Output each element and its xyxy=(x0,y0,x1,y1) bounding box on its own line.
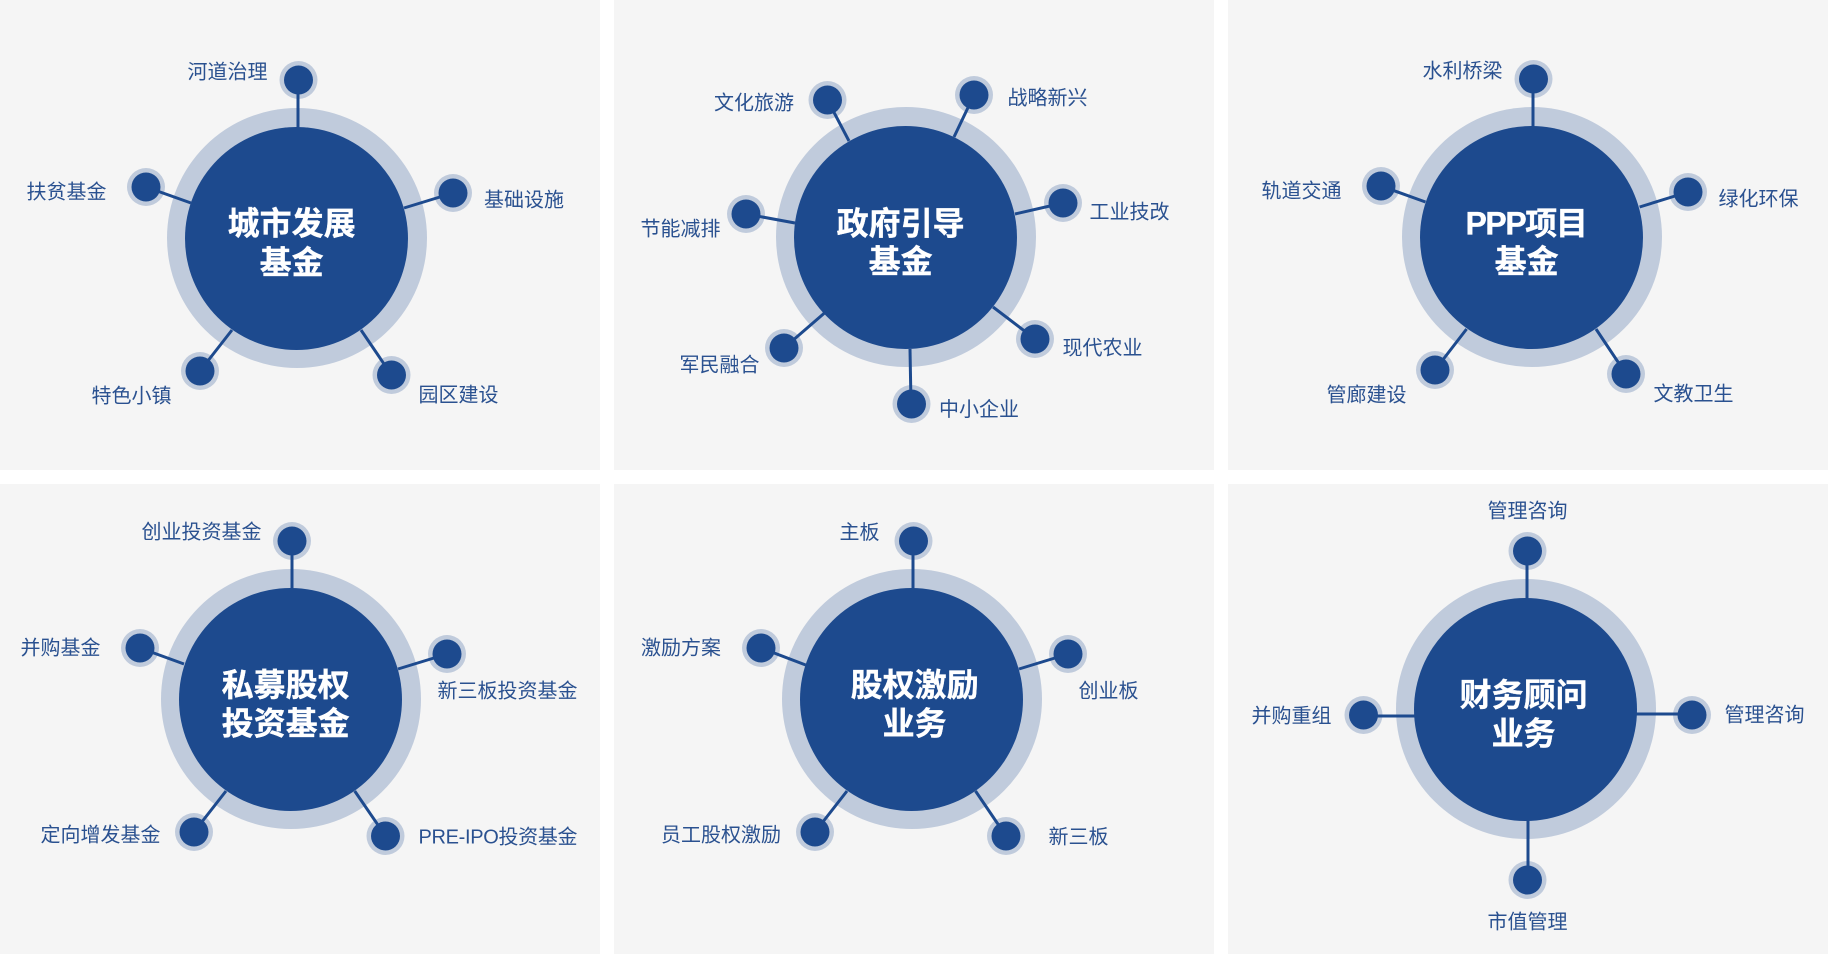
node marker: 文化旅游 xyxy=(808,81,849,141)
heading: 城市发展基金: 城市发展 xyxy=(228,206,356,242)
heading: 城市发展基金: 基金 xyxy=(260,244,324,280)
panel: 私募股权投资基金 xyxy=(0,484,600,954)
central circle xyxy=(1396,579,1656,839)
label: 文化旅游: 文化旅游 xyxy=(714,92,794,114)
label: 节能减排: 节能减排 xyxy=(640,218,720,240)
node marker: 特色小镇 xyxy=(181,330,232,390)
node marker: 园区建设 xyxy=(361,330,410,394)
node marker: 扶贫基金 xyxy=(127,168,191,206)
label: 新三板投资基金: 新三板投资基金 xyxy=(438,680,578,702)
node marker: 管理咨询 (right) xyxy=(1636,696,1711,734)
central circle xyxy=(161,569,421,829)
heading: 财务顾问业务: 业务 xyxy=(1492,716,1556,752)
label: 中小企业: 中小企业 xyxy=(939,398,1019,421)
node marker: 激励方案 xyxy=(742,629,806,667)
label: 水利桥梁: 水利桥梁 xyxy=(1422,60,1502,82)
node marker: 节能减排 xyxy=(727,195,795,233)
panel: PPP项目基金 xyxy=(1228,0,1828,470)
label: 创业板: 创业板 xyxy=(1078,680,1138,702)
heading: PPP项目基金 xyxy=(1465,206,1588,280)
node marker: 定向增发基金 xyxy=(175,791,226,851)
node marker: 管廊建设 xyxy=(1416,329,1467,389)
label: 文教卫生: 文教卫生 xyxy=(1654,382,1734,406)
node marker: 市值管理 xyxy=(1508,820,1546,899)
node marker: 主板 xyxy=(894,522,932,589)
node marker: 新三板 xyxy=(976,791,1025,855)
heading: 城市发展基金 xyxy=(228,206,356,280)
heading: 股权激励业务: 业务 xyxy=(883,706,947,742)
label: 并购基金: 并购基金 xyxy=(20,636,100,660)
label: 河道治理: 河道治理 xyxy=(188,60,268,84)
label: 并购重组: 并购重组 xyxy=(1252,704,1332,728)
node marker: 军民融合 xyxy=(765,313,824,367)
heading: 政府引导基金 xyxy=(837,206,965,280)
node marker: 并购基金 xyxy=(121,629,184,667)
heading: 股权激励业务: 股权激励 xyxy=(851,667,979,703)
panel: 财务顾问业务 xyxy=(1228,484,1828,954)
heading: 财务顾问业务 xyxy=(1460,677,1588,752)
heading: 政府引导基金: 政府引导 xyxy=(837,206,965,242)
heading: 私募股权投资基金: 投资基金 xyxy=(222,706,350,742)
label: 管廊建设: 管廊建设 xyxy=(1326,384,1406,406)
node marker: 现代农业 xyxy=(993,307,1054,358)
node marker: 基础设施 xyxy=(404,174,472,212)
node marker: 水利桥梁 xyxy=(1514,60,1552,127)
heading: 私募股权投资基金 xyxy=(222,667,350,742)
label: 管理咨询 (top): 管理咨询 xyxy=(1488,500,1568,522)
heading: PPP项目基金: 基金 xyxy=(1495,244,1559,280)
node marker: 中小企业 xyxy=(892,349,930,423)
panel: 股权激励业务 xyxy=(614,484,1214,954)
node marker: 创业投资基金 xyxy=(273,522,311,589)
label: 主板: 主板 xyxy=(840,521,880,544)
node marker: 轨道交通 xyxy=(1362,167,1426,205)
central circle xyxy=(167,108,427,368)
node marker: 河道治理 xyxy=(280,61,318,128)
heading: PPP项目基金: PPP项目 xyxy=(1465,206,1588,242)
heading: 股权激励业务 xyxy=(851,667,979,742)
label: 特色小镇: 特色小镇 xyxy=(92,384,172,408)
label: 扶贫基金: 扶贫基金 xyxy=(26,180,106,204)
node marker: 并购重组 xyxy=(1344,696,1415,734)
node marker: 工业技改 xyxy=(1015,184,1082,222)
label: 定向增发基金: 定向增发基金 xyxy=(40,824,160,846)
label: PRE-IPO投资基金: PRE-IPO投资基金 xyxy=(418,826,578,848)
label: 绿化环保: 绿化环保 xyxy=(1718,188,1798,210)
label: 激励方案: 激励方案 xyxy=(641,636,721,660)
label: 军民融合: 军民融合 xyxy=(680,354,760,376)
label: 创业投资基金: 创业投资基金 xyxy=(142,520,262,544)
label: 基础设施: 基础设施 xyxy=(484,188,564,212)
node marker: 新三板投资基金 xyxy=(398,635,466,673)
label: 战略新兴: 战略新兴 xyxy=(1008,86,1088,110)
label: 员工股权激励: 员工股权激励 xyxy=(661,824,781,846)
panel: 城市发展基金 xyxy=(0,0,600,470)
central circle xyxy=(782,569,1042,829)
heading: 政府引导基金: 基金 xyxy=(869,244,933,280)
panel: 政府引导基金 xyxy=(614,0,1214,470)
label: 管理咨询 (right): 管理咨询 xyxy=(1724,704,1804,726)
node marker: 员工股权激励 xyxy=(796,791,847,851)
node marker: 战略新兴 xyxy=(954,76,993,137)
central circle xyxy=(776,107,1036,367)
node marker: PRE-IPO投资基金 xyxy=(355,791,404,855)
label: 工业技改: 工业技改 xyxy=(1090,200,1170,224)
node marker: 绿化环保 xyxy=(1640,173,1707,211)
heading: 私募股权投资基金: 私募股权 xyxy=(222,667,350,703)
node marker: 文教卫生 xyxy=(1596,329,1645,393)
label: 现代农业: 现代农业 xyxy=(1062,336,1142,360)
label: 市值管理: 市值管理 xyxy=(1488,910,1568,934)
central circle xyxy=(1402,107,1662,367)
node marker: 创业板 xyxy=(1019,635,1087,673)
label: 新三板: 新三板 xyxy=(1048,826,1108,848)
label: 园区建设: 园区建设 xyxy=(418,384,498,406)
label: 轨道交通: 轨道交通 xyxy=(1262,180,1342,202)
heading: 财务顾问业务: 财务顾问 xyxy=(1460,677,1588,713)
node marker: 管理咨询 (top) xyxy=(1508,532,1546,599)
